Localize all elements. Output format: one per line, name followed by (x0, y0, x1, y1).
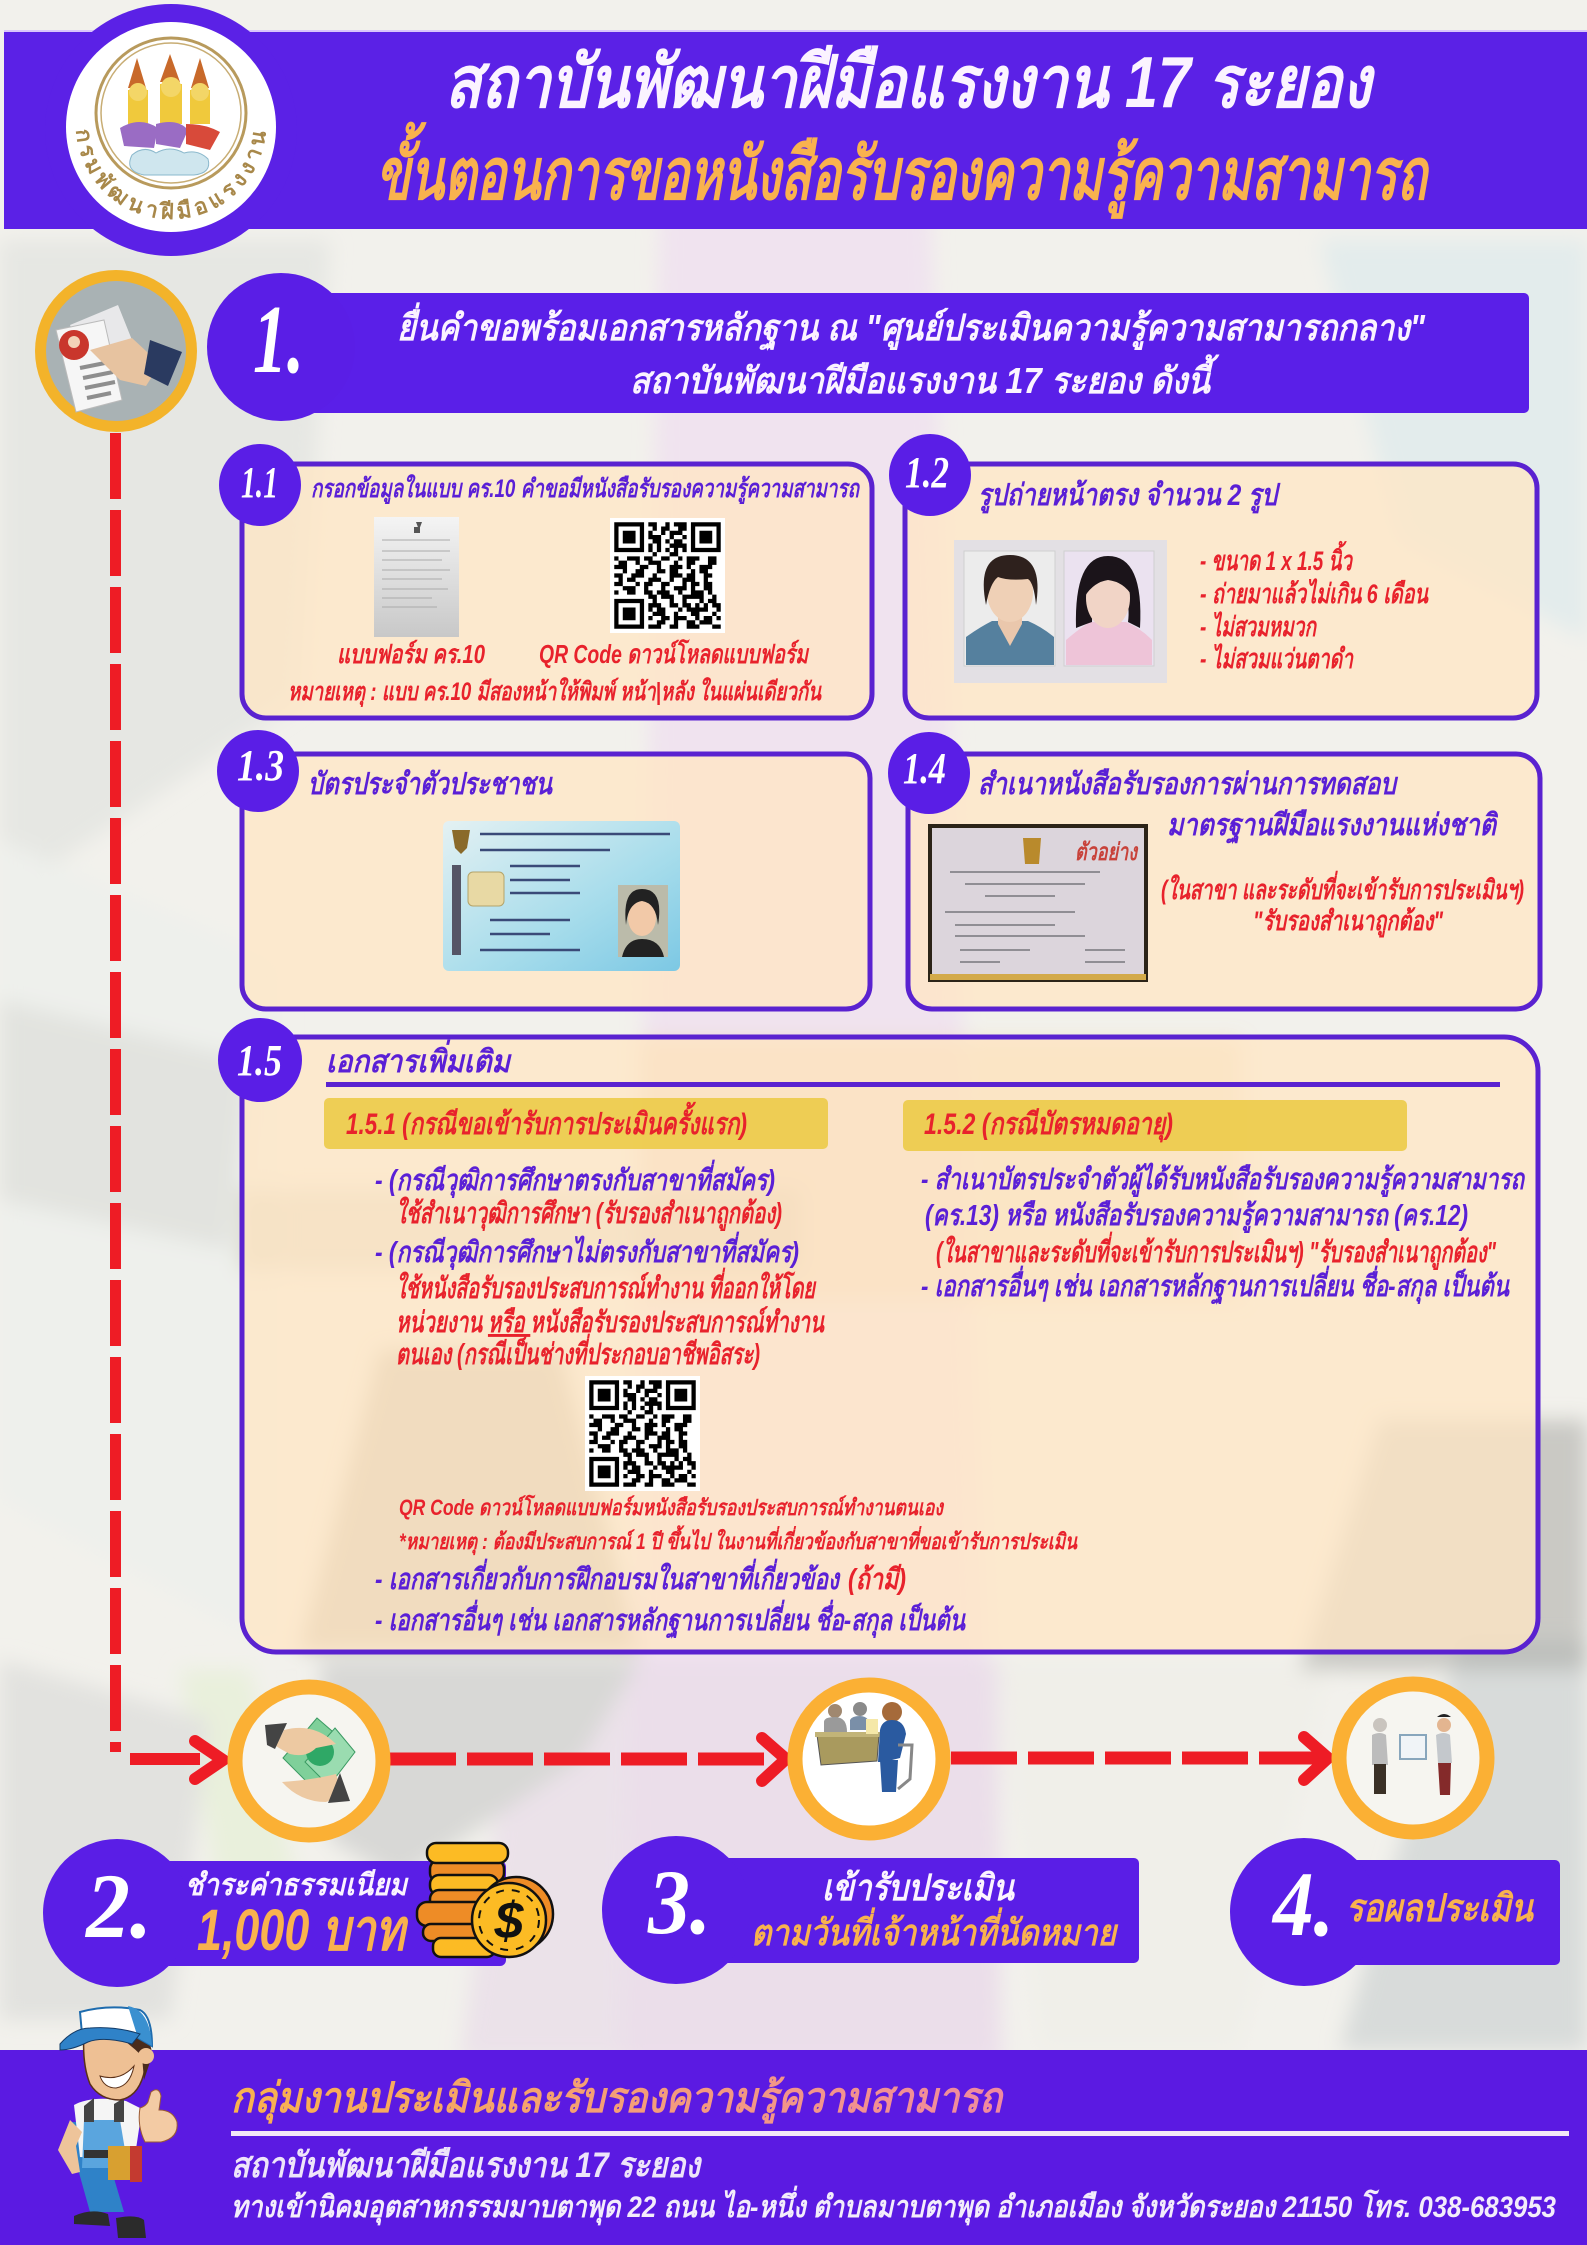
1.5 heading: เอกสารเพิ่มเติม (326, 1039, 512, 1079)
1.5.1 label (324, 1098, 828, 1149)
QR caption and note: QR Code ดาวน์โหลดแบบฟอร์มหนังสือรับรองประสบการณ์ทำงานตนเอง (399, 1494, 945, 1520)
1.5.1 requirement list (375, 1159, 825, 1371)
panel 1.1: application form: 1.1 (241, 458, 278, 507)
sample stamp: ตัวอย่าง (1075, 839, 1139, 866)
step 2 banner (43, 1839, 506, 1987)
form QR code (610, 518, 725, 633)
QR caption: QR Code ดาวน์โหลดแบบฟอร์ม (539, 638, 809, 669)
panel 1.3: ID card (217, 730, 870, 1009)
step 4 banner (1230, 1838, 1560, 1986)
panel 1.4: certificate copy: 1.4 (903, 744, 946, 793)
step 1 description (397, 302, 1426, 401)
1.5.2 requirement list (921, 1162, 1526, 1305)
institute name: สถาบันพัฒนาฝีมือแรงงาน 17 ระยอง (231, 2146, 702, 2185)
form thumbnail (374, 517, 459, 637)
red dashed flow line (116, 433, 1328, 1781)
step 1 description: ยื่นคำขอพร้อมเอกสารหลักฐาน ณ "ศูนย์ประเมินความรู้ความสามารถกลาง" (397, 302, 1426, 351)
QR caption and note: *หมายเหตุ : ต้องมีประสบการณ์ 1 ปี ขึ้นไป ในงานที่เกี่ยวข้องกับสาขาที่ขอเข้ารับการประเมิน (399, 1525, 1078, 1556)
footer band (0, 2050, 1587, 2245)
step 3 description (751, 1867, 1119, 1953)
1.4 heading (978, 768, 1499, 845)
step 1 banner (207, 273, 1529, 421)
heading: institute name: สถาบันพัฒนาฝีมือแรงงาน 17 ระยอง (445, 43, 1376, 123)
logo: department seal (66, 4, 276, 256)
other documents list (375, 1558, 966, 1639)
step number 1: 1. (253, 286, 304, 394)
step 3 description: เข้ารับประเมิน (822, 1867, 1015, 1908)
panel 1.3: ID card: 1.3 (237, 741, 284, 790)
step 3 banner (602, 1836, 1139, 1984)
photo requirements: - ไม่สวมแว่นตาดำ (1200, 643, 1354, 674)
1.2 heading: รูปถ่ายหน้าตรง จำนวน 2 รูป (978, 479, 1281, 514)
panel 1.4: certificate copy (888, 732, 1540, 1009)
panel 1.2: photos (889, 434, 1537, 718)
1.3 heading: บัตรประจำตัวประชาชน (308, 768, 553, 801)
icon: stack of coins: $ (494, 1892, 525, 1950)
icon: money changing hands (235, 1687, 383, 1835)
photo requirements (1200, 540, 1429, 674)
1.5.1 requirement list: หน่วยงาน หรือ หนังสือรับรองประสบการณ์ทำงาน (396, 1306, 825, 1339)
step 1 description: สถาบันพัฒนาฝีมือแรงงาน 17 ระยอง ดังนี้ (630, 354, 1220, 401)
form caption: แบบฟอร์ม คร.10 (337, 639, 485, 669)
step 3 description: ตามวันที่เจ้าหน้าที่นัดหมาย (751, 1907, 1119, 1953)
QR caption and note (399, 1494, 1078, 1556)
fee amount: 1,000 บาท (197, 1898, 409, 1963)
1.5.1 requirement list: - (กรณีวุฒิการศึกษาไม่ตรงกับสาขาที่สมัคร) (375, 1231, 799, 1271)
mascot: technician with thumbs up (58, 2006, 177, 2238)
1.5.1 requirement list: ใช้สำเนาวุฒิการศึกษา (รับรองสำเนาถูกต้อง) (396, 1196, 782, 1232)
certificate sample (930, 826, 1146, 980)
seal caption: กรมพัฒนาฝีมือแรงงาน (76, 130, 266, 220)
1.5.1 label: 1.5.1 (กรณีขอเข้ารับการประเมินครั้งแรก) (346, 1101, 747, 1141)
header band (4, 30, 1587, 229)
other documents list: - เอกสารอื่นๆ เช่น เอกสารหลักฐานการเปลี่ยน ชื่อ-สกุล เป็นต้น (375, 1599, 966, 1639)
other documents list: (ถ้ามี) (848, 1563, 906, 1596)
step 4 description: รอผลประเมิน (1346, 1888, 1535, 1930)
panel 1.5: additional documents (218, 1018, 1538, 1652)
ID card sample (443, 821, 680, 971)
1.5.1 requirement list: - (กรณีวุฒิการศึกษาตรงกับสาขาที่สมัคร) (375, 1159, 775, 1199)
step number 4: 4. (1271, 1853, 1334, 1955)
1.4 heading: สำเนาหนังสือรับรองการผ่านการทดสอบ (978, 768, 1398, 801)
step number 3: 3. (647, 1851, 711, 1953)
icon: handing over certificate (1339, 1684, 1487, 1832)
1.5.2 label (903, 1100, 1407, 1151)
other documents list: - เอกสารเกี่ยวกับการฝึกอบรมในสาขาที่เกี่ยวข้อง (375, 1558, 841, 1596)
certificate condition: "รับรองสำเนาถูกต้อง" (1253, 906, 1444, 938)
note: หมายเหตุ : แบบ คร.10 มีสองหน้าให้พิมพ์ หน้า|หลัง ในแผ่นเดียวกัน (288, 677, 822, 707)
panel 1.5: additional documents: 1.5 (237, 1036, 282, 1085)
icon: stack of coins (417, 1843, 553, 1957)
fee label: ชำระค่าธรรมเนียม (185, 1869, 409, 1902)
photo requirements: - ถ่ายมาแล้วไม่เกิน 6 เดือน (1200, 578, 1429, 609)
1.5.1 requirement list: ใช้หนังสือรับรองประสบการณ์ทำงาน ที่ออกให้โดย (396, 1267, 817, 1305)
photo requirements: - ไม่สวมหมวก (1200, 611, 1317, 642)
icon: assessment interview (795, 1685, 943, 1833)
1.1 heading: กรอกข้อมูลในแบบ คร.10 คำขอมีหนังสือรับรองความรู้ความสามารถ (311, 474, 860, 504)
certificate condition (1161, 870, 1524, 938)
step number 2: 2. (84, 1855, 152, 1957)
experience form QR code (585, 1376, 700, 1491)
sample portraits (954, 540, 1167, 683)
footer heading: กลุ่มงานประเมินและรับรองความรู้ความสามารถ (231, 2074, 1004, 2124)
1.5.2 label: 1.5.2 (กรณีบัตรหมดอายุ) (924, 1108, 1173, 1143)
panel 1.1: application form (219, 444, 872, 718)
1.4 heading: มาตรฐานฝีมือแรงงานแห่งชาติ (1167, 809, 1499, 845)
icon: submitting documents (35, 270, 197, 432)
photo requirements: - ขนาด 1 x 1.5 นิ้ว (1200, 540, 1353, 576)
1.5.1 requirement list: ตนเอง (กรณีเป็นช่างที่ประกอบอาชีพอิสระ) (396, 1333, 760, 1371)
panel 1.2: photos: 1.2 (905, 448, 949, 497)
